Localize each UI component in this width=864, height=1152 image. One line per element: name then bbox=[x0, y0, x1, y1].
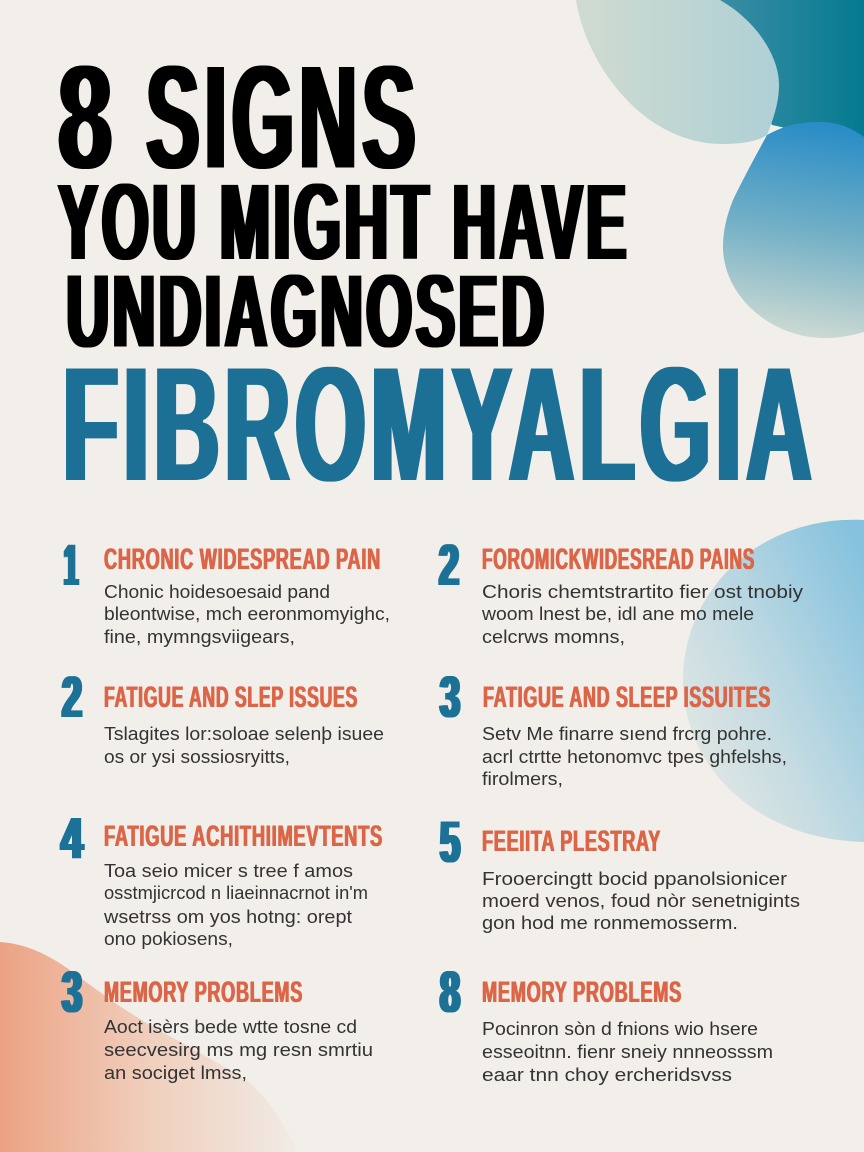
title line: 8 signs: SIGNS bbox=[146, 34, 420, 200]
decorative blob: blue right bbox=[723, 122, 864, 338]
body text: firolmers, bbox=[482, 769, 563, 789]
body text: celcrws momns, bbox=[482, 627, 625, 647]
body text: moerd venos, foud nòr senetnigints bbox=[482, 891, 800, 911]
panel: sign left row 4 bbox=[62, 960, 373, 1083]
number 3: 3 bbox=[440, 665, 460, 730]
body text: Toa seio micer s tree f amos bbox=[104, 861, 353, 881]
panel: sign right row 4 bbox=[440, 960, 773, 1085]
title bbox=[58, 34, 817, 516]
heading: FATIGUE AND SLEP ISSUES bbox=[104, 681, 358, 714]
number 5: 5 bbox=[440, 810, 460, 875]
body text: seecvesirg ms mg resn smrtiu bbox=[104, 1040, 373, 1060]
body text: an sociget lmss, bbox=[104, 1063, 247, 1083]
number 4: 4 bbox=[61, 806, 83, 871]
title line: 8 signs bbox=[58, 34, 420, 200]
body text: Tslagites lor:soloae selenþ isuee bbox=[104, 724, 384, 744]
panel: sign right row 1 bbox=[439, 533, 803, 647]
panel: sign left row 1: 1 bbox=[64, 533, 78, 598]
body text bbox=[104, 582, 390, 647]
body text: Aoct isèrs bede wtte tosne cd bbox=[104, 1017, 357, 1037]
panel: sign left row 2 bbox=[62, 665, 384, 767]
body text: gon hod me ronmemosserm. bbox=[482, 913, 738, 933]
number 2: 2 bbox=[62, 665, 82, 730]
number 2: 2 bbox=[439, 533, 459, 598]
panel: sign right row 2 bbox=[440, 665, 787, 789]
body text bbox=[104, 724, 384, 767]
body text: Frooercingtt bocid ppanolsionicer bbox=[482, 869, 787, 889]
decorative blob: light blue circle right bbox=[683, 520, 864, 842]
heading: MEMORY PROBLEMS bbox=[104, 976, 303, 1009]
body text: eaar tnn choy ercheridsvss bbox=[482, 1065, 732, 1085]
heading: FATIGUE ACHITHIIMEVTENTS bbox=[104, 820, 383, 853]
body text bbox=[482, 724, 787, 789]
panel: sign right row 3 bbox=[440, 810, 800, 933]
body text bbox=[482, 1019, 773, 1085]
body text: Choris chemtstrartito fier ost tnobiy bbox=[482, 582, 803, 602]
body text: Pocinron sòn d fnions wio hsere bbox=[482, 1019, 758, 1039]
panel: sign left row 1 bbox=[64, 533, 390, 647]
decorative blob: peach bottom left bbox=[0, 942, 298, 1152]
body text: Chonic hoidesoesaid pand bbox=[104, 582, 330, 602]
number 8: 8 bbox=[440, 960, 460, 1025]
panel: sign left row 3 bbox=[61, 806, 383, 949]
body text: wsetrss om yos hotng: orept bbox=[103, 907, 352, 927]
body text bbox=[481, 582, 803, 647]
body text: acrl ctrtte hetonomvc tpes ghfelshs, bbox=[482, 747, 787, 767]
decorative blob: dark teal top right bbox=[715, 0, 864, 145]
body text: esseoitnn. fienr sneiy nnneosssm bbox=[482, 1042, 773, 1062]
body text bbox=[104, 1017, 373, 1083]
title line: 8 signs: 8 bbox=[58, 34, 118, 200]
body text: osstmjicrcod n liaeinnacrnot in'm bbox=[104, 883, 368, 903]
body text bbox=[482, 869, 800, 933]
body text: woom lnest be, idl ane mo mele bbox=[481, 604, 754, 624]
number 3: 3 bbox=[62, 960, 82, 1025]
heading: FEEIITA PLESTRAY bbox=[482, 825, 661, 858]
body text: ono pokiosens, bbox=[104, 929, 233, 949]
body text: Setv Me finarre sıend frcrg pohre. bbox=[482, 724, 772, 744]
heading: CHRONIC WIDESPREAD PAIN bbox=[104, 543, 381, 576]
body text: fine, mymngsviigears, bbox=[104, 627, 295, 647]
body text: bleontwise, mch eeronmomyighc, bbox=[104, 604, 390, 624]
body text bbox=[103, 861, 368, 949]
heading: MEMORY PROBLEMS bbox=[482, 976, 682, 1009]
decorative blob: pale green top bbox=[576, 0, 779, 144]
body text: os or ysi sossiosryitts, bbox=[104, 747, 290, 767]
